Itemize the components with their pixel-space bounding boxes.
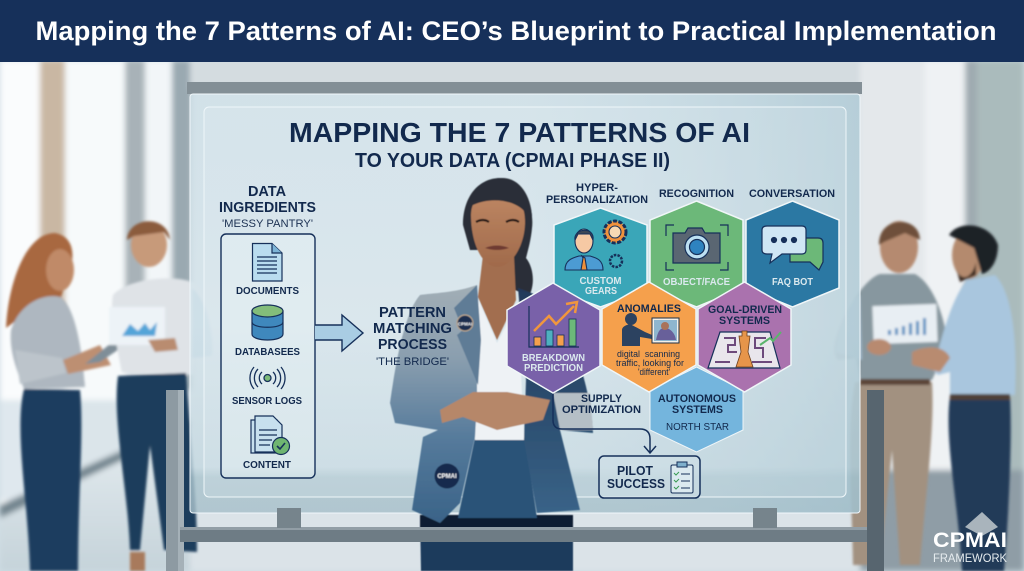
icon: camera [666,225,728,270]
hair back [463,178,533,296]
panel: data ingredients: CONTENT [243,460,291,471]
icon: database [252,305,283,340]
label: pattern matching process: PROCESS [378,337,447,353]
glass board [187,82,862,513]
label: pattern matching process: MATCHING [373,321,452,337]
icon: rising bar chart [529,302,579,347]
hexagon: anomalies: traffic, looking for [616,358,684,368]
heading: data ingredients: DATA [248,184,287,200]
presenter: CPMAI [437,474,457,480]
left colleagues [6,221,212,571]
icon: content check [251,416,290,454]
header band [0,0,1024,62]
eyes and mouth [476,220,519,222]
hexagon: recognition [650,201,743,307]
hexagon: conversation [746,201,839,307]
blazer left [390,285,477,523]
labels above top hexagons: HYPER- [576,182,618,194]
hexagon: hyper-personalization: GEARS [585,286,617,297]
callout: pilot success [599,456,700,498]
jacket logo [434,464,460,488]
labels above top hexagons: CONVERSATION [749,188,835,200]
logo: CPMAI framework: CPMAI [933,529,1007,552]
hexagon: goal-driven systems [698,282,791,392]
hexagon: breakdown prediction: PREDICTION [524,363,583,374]
hexagon: anomalies [602,282,696,392]
man with chart [835,274,948,380]
hexagon: goal-driven systems: GOAL-DRIVEN [708,304,782,316]
hexagon: goal-driven systems: SYSTEMS [719,315,770,327]
labels above top hexagons: PERSONALIZATION [546,194,648,206]
board stand [166,390,884,571]
panel: data ingredients: DOCUMENTS [236,286,299,297]
label: supply optimization: SUPPLY [581,393,623,405]
icon: chat bubbles [762,226,823,270]
logo: CPMAI framework: FRAMEWORK [933,551,1007,565]
jacket badge [457,315,473,331]
callout: pilot success: SUCCESS [607,477,665,491]
hexagon: hyper-personalization: CUSTOM [580,276,622,287]
icon: clipboard checklist [671,462,693,493]
hands [440,392,550,430]
board subheading: TO YOUR DATA (CPMAI PHASE II) [355,150,670,172]
panel: data ingredients [219,184,316,478]
hexagon: anomalies: 'different' [638,367,670,377]
neck [478,255,516,340]
icon: maze with chess king [708,331,781,368]
labels above top hexagons: RECOGNITION [659,188,734,200]
hexagon: recognition: OBJECT/FACE [663,277,730,288]
man [131,223,167,267]
label: supply optimization [562,393,641,416]
panel: data ingredients: DATABASEES [235,347,300,358]
hexagon: autonomous systems [650,367,743,452]
hexagon: breakdown prediction: BREAKDOWN [522,353,585,364]
blazer right [518,288,593,513]
presenter: CPMAI [458,322,472,326]
hexagon: autonomous systems: AUTONOMOUS [658,393,736,405]
hexagon: breakdown prediction [507,283,600,393]
label: pattern matching process: PATTERN [379,305,446,321]
icon: officer and portrait [622,313,679,346]
man in blue shirt [933,275,1016,395]
presenter [390,178,593,571]
icon: document [252,244,282,281]
face [471,190,525,267]
icon: sensor [250,367,285,389]
hexagon: anomalies: ANOMALIES [617,303,681,315]
callout: pilot success: PILOT [617,464,653,478]
hexagon: conversation: FAQ BOT [772,277,813,288]
page title: Mapping the 7 Patterns of AI: CEO’s Blueprint to Practical Implementation [36,16,996,46]
ingredient box [221,234,315,478]
panel: data ingredients: 'MESSY PANTRY' [222,218,313,230]
label: pattern matching process: 'THE BRIDGE' [376,356,449,368]
hexagon: anomalies: digital scanning [617,349,680,359]
board heading: MAPPING THE 7 PATTERNS OF AI [289,117,750,148]
hexagon: autonomous systems: NORTH STAR [666,421,729,433]
icon: person with gears [565,221,626,270]
pants [420,515,573,571]
label: pattern matching process [373,305,452,368]
logo: CPMAI framework [933,512,1007,565]
right colleagues [835,221,1016,571]
connector arrow to pilot success [553,392,656,453]
label: supply optimization: OPTIMIZATION [562,404,641,416]
hexagon: autonomous systems: SYSTEMS [672,404,723,416]
lapel [454,285,481,385]
labels above top hexagons [546,182,835,206]
panel: data ingredients: SENSOR LOGS [232,396,302,407]
right sleeve highlight [553,393,593,430]
arrow: ingredients to pattern matching [315,315,363,351]
hexagon: hyper-personalization [554,208,647,307]
woman [6,233,72,328]
shirt [475,297,524,440]
panel: data ingredients: INGREDIENTS [219,200,316,216]
